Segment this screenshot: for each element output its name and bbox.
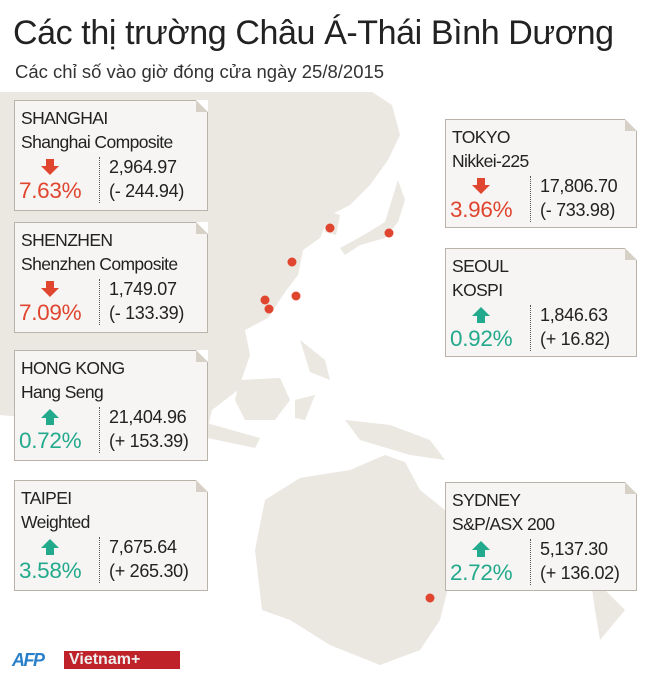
panel: Seoul	[445, 248, 637, 357]
subtitle: Các chỉ số vào giờ đóng cửa ngày 25/8/2015	[15, 61, 384, 82]
panel: Tokyo: 17,806.70	[540, 176, 617, 196]
panel: Sydney	[445, 482, 637, 591]
panel: Seoul: (+ 16.82)	[540, 329, 610, 349]
panel: Shanghai: (- 244.94)	[109, 181, 184, 201]
panel: Taipei: (+ 265.30)	[109, 561, 189, 581]
panel: Taipei: Weighted	[21, 512, 90, 532]
panel: Sydney: (+ 136.02)	[540, 563, 620, 583]
panel: Taipei: 3.58%	[19, 558, 81, 583]
panel: Taipei: 7,675.64	[109, 537, 177, 557]
panel: Shenzhen: 7.09%	[19, 300, 81, 325]
panel: Seoul: 0.92%	[450, 326, 512, 351]
panel: Shanghai	[14, 100, 208, 211]
panel: Sydney: 5,137.30	[540, 539, 608, 559]
panel: Hong Kong: HONG KONG	[21, 358, 124, 378]
panel: Shenzhen: (- 133.39)	[109, 303, 184, 323]
logo: AFP Vietnam+	[12, 650, 180, 670]
panel: Hong Kong: 0.72%	[19, 428, 81, 453]
title: Các thị trường Châu Á-Thái Bình Dương	[13, 14, 614, 52]
panel: Shanghai: SHANGHAI	[21, 108, 108, 128]
panel: Shanghai: 7.63%	[19, 178, 81, 203]
panel: Taipei	[14, 480, 208, 591]
panel: Seoul: KOSPI	[452, 280, 502, 300]
panel: Tokyo: TOKYO	[452, 127, 510, 147]
panel: Sydney: S&P/ASX 200	[452, 514, 554, 534]
panel: Hong Kong: (+ 153.39)	[109, 431, 189, 451]
panel: Shenzhen: Shenzhen Composite	[21, 254, 178, 274]
panel: Hong Kong: 21,404.96	[109, 407, 186, 427]
panel: Hong Kong: Hang Seng	[21, 382, 103, 402]
panel: Sydney: 2.72%	[450, 560, 512, 585]
panel: Tokyo: Nikkei-225	[452, 151, 529, 171]
panel: Tokyo: (- 733.98)	[540, 200, 615, 220]
logo: AFP Vietnam+: Vietnam+	[69, 651, 140, 668]
panel: Shenzhen	[14, 222, 208, 333]
panel: Shenzhen: SHENZHEN	[21, 230, 112, 250]
panel: Seoul: SEOUL	[452, 256, 508, 276]
panel: Sydney: SYDNEY	[452, 490, 520, 510]
panel: Shenzhen: 1,749.07	[109, 279, 177, 299]
panel: Hong Kong	[14, 350, 208, 461]
panel: Shanghai: Shanghai Composite	[21, 132, 173, 152]
panel: Tokyo	[445, 119, 637, 228]
panel: Seoul: 1,846.63	[540, 305, 608, 325]
panel: Tokyo: 3.96%	[450, 197, 512, 222]
panel: Taipei: TAIPEI	[21, 488, 72, 508]
panel: Shanghai: 2,964.97	[109, 157, 177, 177]
logo: AFP Vietnam+: AFP	[12, 650, 44, 670]
